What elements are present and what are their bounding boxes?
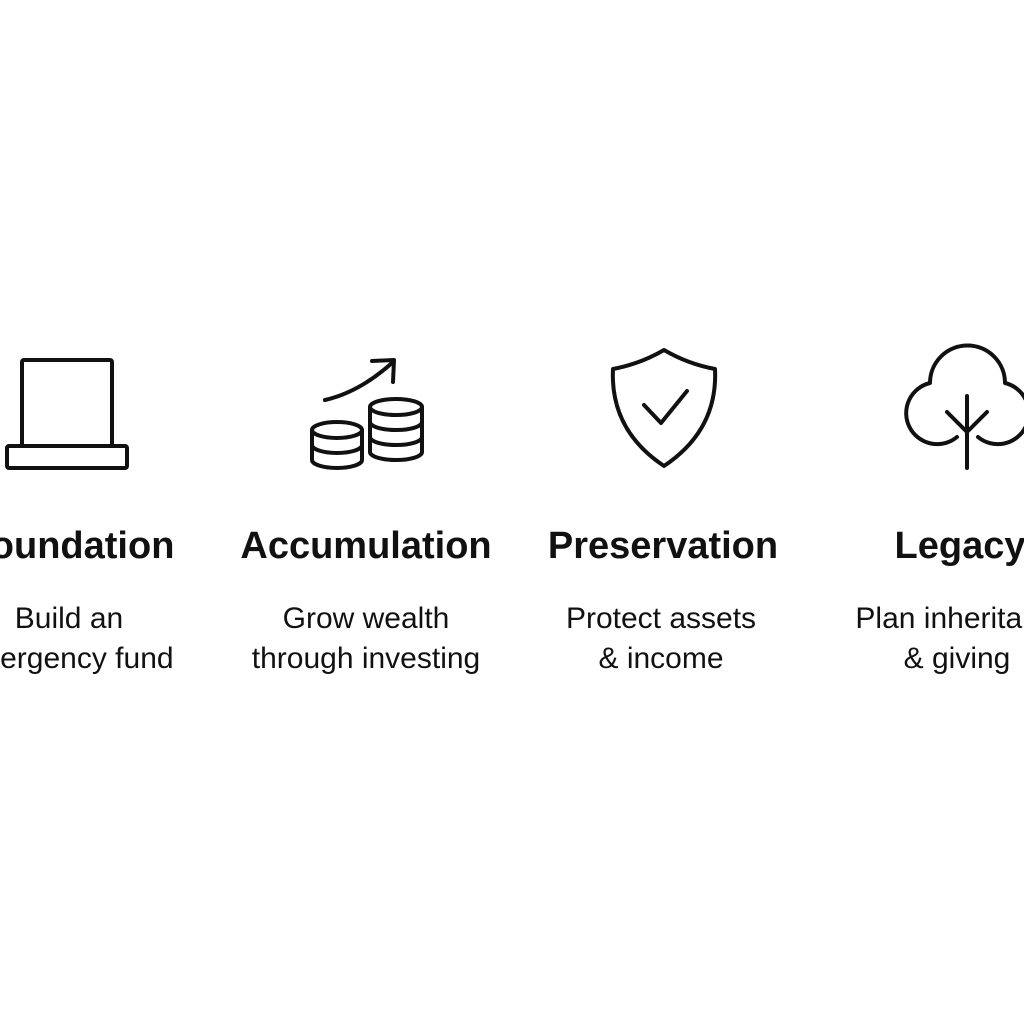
text: legacy desc: & giving [904, 642, 1010, 675]
icon: tree [906, 346, 1024, 468]
icon: building [7, 360, 127, 468]
heading: Preservation: Preservation [548, 525, 778, 567]
heading: Accumulation: Accumulation [240, 525, 492, 567]
text: preservation desc: & income [598, 642, 724, 675]
panel: preservation [548, 350, 778, 675]
icon: coins with arrow [312, 360, 422, 468]
text: accumulation desc: through investing [252, 642, 480, 675]
panel: accumulation [240, 360, 492, 675]
panel: legacy [855, 346, 1024, 675]
text: foundation desc: Build an [15, 602, 123, 635]
text: preservation desc: Protect assets [566, 602, 756, 635]
heading: Legacy: Legacy [895, 525, 1024, 567]
icon: shield check [613, 350, 715, 466]
text: accumulation desc: Grow wealth [283, 602, 449, 635]
panel: foundation [0, 360, 174, 675]
